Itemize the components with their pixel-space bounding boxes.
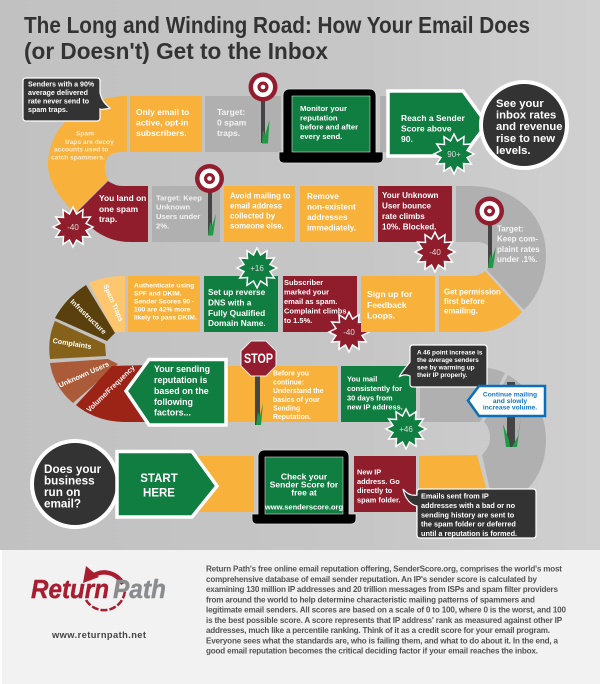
laptop: monitor your reputation: reputation xyxy=(300,114,338,122)
step: reverse DNS: DNS with a xyxy=(208,298,252,308)
circle: see your inbox rates: levels. xyxy=(496,145,531,157)
callout: 90% delivered rate: Senders with a 90% xyxy=(28,80,95,88)
step: subscriber marked as spam: to 1.5%. xyxy=(284,316,312,325)
step: remove non-existent addresses: non-existent xyxy=(307,202,356,212)
road row 1 xyxy=(23,72,567,213)
curve: get permission: emailing. xyxy=(444,306,478,316)
step: feedback loops xyxy=(361,276,435,332)
step: unknown user bounce: User bounce xyxy=(382,202,432,210)
callout: 46 point increase: the average senders xyxy=(417,357,479,364)
step: you land on one spam trap xyxy=(78,181,148,242)
callout: 46 point increase: see by warming up xyxy=(417,364,475,372)
step: only email to subscribers xyxy=(130,96,202,152)
badge: -40 trap: -40 xyxy=(67,223,79,232)
gray connector xyxy=(380,96,388,152)
text block: about sender score: addresses, much like a percentile ranking. Think of it as a credit score for your email program. xyxy=(206,626,550,635)
step: reverse DNS: Fully Qualified xyxy=(208,308,265,318)
icon: volume sign xyxy=(468,382,545,447)
circle: see your inbox rates: rise to new xyxy=(496,133,555,145)
callout: 46 point increase: their IP properly. xyxy=(417,372,467,379)
callout: emails sent from bad IP: addresses with a bad or no xyxy=(421,501,516,510)
text block: about sender score: is the best possible score. A score represents that IP address' rank as measured against other IP xyxy=(206,616,563,625)
arrow: start here: HERE xyxy=(143,488,175,500)
badge: -40 trap xyxy=(53,207,93,247)
text block: about sender score: legitimate email senders. All scores are based on a scale of 0 to 100, where 0 is the worst, and 100 xyxy=(206,606,566,615)
curve: spam traps definition: Spam xyxy=(76,130,94,138)
factor: spam traps xyxy=(89,276,125,332)
circle: does your business run on email: Does your xyxy=(44,463,102,476)
arrow: start here: START xyxy=(140,473,178,485)
step: feedback loops: Feedback xyxy=(367,300,407,310)
step: only email to subscribers: Only email to xyxy=(136,107,189,117)
badge: +46: +46 xyxy=(399,425,413,434)
laptop: monitor your reputation: every send. xyxy=(300,132,342,141)
curve: target complaint rates: under .1%. xyxy=(497,255,537,264)
icon: stop sign: STOP xyxy=(244,351,273,366)
laptop: check your sender score: www.senderscore.org xyxy=(264,502,343,512)
road row 4 xyxy=(126,341,546,495)
step: remove non-existent addresses xyxy=(300,186,374,242)
step: unknown user bounce: rate climbs xyxy=(382,212,425,221)
step: unknown user bounce: 10%. Blocked. xyxy=(382,222,436,232)
step: before you continue: Understand the xyxy=(273,388,324,395)
step: avoid mailing: someone else. xyxy=(230,222,284,230)
step: feedback loops: Loops. xyxy=(367,310,395,320)
step: you mail consistently: consistently for xyxy=(347,384,402,393)
step: authenticate: SPF and DKIM. xyxy=(134,290,182,298)
step: subscriber marked as spam xyxy=(283,276,357,332)
step: before you continue: Reputation. xyxy=(273,414,311,421)
icon: volume sign: Continue mailing xyxy=(483,392,537,398)
callout: emails sent from bad IP xyxy=(403,489,536,538)
logo: Return Path xyxy=(31,566,166,610)
badge: 90+ xyxy=(434,134,474,174)
step: before you continue: continue: xyxy=(273,379,304,386)
step: new IP address: New IP xyxy=(357,468,381,476)
factor: complaints xyxy=(49,321,106,359)
text block: about sender score: from around the world to help determine characteristic mailing patterns of spammers and xyxy=(206,595,535,604)
step: new IP address: spam folder. xyxy=(357,496,401,504)
circle: see your inbox rates: inbox rates xyxy=(496,110,556,122)
curve: get permission: Get permission xyxy=(444,288,501,296)
road row 5 xyxy=(32,441,536,538)
curve: gray right road xyxy=(482,375,546,495)
step: before you continue: basics of your xyxy=(273,397,320,404)
step: subscriber marked as spam: marked your xyxy=(284,288,329,296)
circle: does your business run on email: business xyxy=(44,474,95,488)
curve: target complaint rates: plaint rates xyxy=(497,245,540,254)
curve: target complaint rates: Keep com- xyxy=(497,234,538,244)
callout: 90% delivered rate: average delivered xyxy=(28,89,88,97)
text block: about sender score: comprehensive database of email sender reputation. An IP's sender score is calculated by xyxy=(206,575,537,584)
step: orange connector xyxy=(195,456,254,512)
step: authenticate: likely to pass DKIM. xyxy=(134,314,197,322)
curve: gray upper road xyxy=(420,366,505,422)
step: subscriber marked as spam: Complaint climbs xyxy=(284,306,347,316)
step: you land on one spam trap: one spam xyxy=(99,204,138,214)
step: authenticate: Sender Scores 90 - xyxy=(134,298,194,306)
arrow: start here xyxy=(117,452,217,517)
step: only email to subscribers: subscribers. xyxy=(136,128,187,138)
step: unknown user bounce: Your Unknown xyxy=(382,191,439,200)
callout: emails sent from bad IP: Emails sent from IP xyxy=(421,492,489,500)
arrow: reach a sender score above 90 xyxy=(388,91,487,156)
arrow: your sending reputation: Your sending xyxy=(154,364,210,374)
step: avoid mailing: Avoid mailing to xyxy=(230,192,291,200)
arrow: your sending reputation: based on the xyxy=(154,386,209,396)
arrow: your sending reputation: following xyxy=(154,397,193,407)
step: target 0 spam traps: Target: xyxy=(217,107,245,117)
curve: get permission xyxy=(439,271,522,332)
step: subscriber marked as spam: email as spam. xyxy=(284,297,337,306)
laptop: check your sender score: Sender Score for xyxy=(270,480,339,490)
arrow: reach a sender score above 90: Reach a Sender xyxy=(401,113,465,123)
arrow: reach a sender score above 90: Score above xyxy=(401,124,452,134)
arrow: reach a sender score above 90: 90. xyxy=(401,134,413,144)
step: target unknown users: Users under xyxy=(156,212,200,221)
curve: spam traps definition: catch spammers. xyxy=(51,154,105,162)
step: target 0 spam traps: 0 spam xyxy=(217,118,247,128)
factor: unknown users: Unknown Users xyxy=(57,359,110,390)
step: authenticate: 100 are 42% more xyxy=(134,306,191,314)
arrow: your sending reputation: reputation is xyxy=(154,375,207,385)
curve: target complaint rates: Target: xyxy=(497,224,524,234)
logo: Return Path: Return xyxy=(31,576,109,604)
laptop: check your sender score: free at xyxy=(291,488,317,498)
step: reverse DNS: Set up reverse xyxy=(208,287,266,297)
step: new IP address: directly to xyxy=(357,486,393,495)
circle: see your inbox rates xyxy=(481,82,567,168)
factor: volume/frequency xyxy=(76,363,148,422)
panel: footer xyxy=(0,550,600,684)
text block: about sender score: Return Path's free online email reputation offering, SenderScore.org, comprises the world's most xyxy=(206,564,562,574)
laptop: check your sender score xyxy=(252,450,356,524)
website url: www.returnpath.net xyxy=(51,630,146,640)
circle: see your inbox rates: and revenue xyxy=(496,121,563,133)
badge: +46 xyxy=(386,409,426,449)
badge: -40 bounce xyxy=(415,232,455,272)
badge: -40 complaint: -40 xyxy=(343,328,355,337)
laptop: monitor your reputation: before and after xyxy=(300,123,358,132)
badge: 90+: 90+ xyxy=(447,150,461,159)
circle: does your business run on email xyxy=(32,441,118,527)
callout: 90% delivered rate: spam traps. xyxy=(28,106,68,114)
step: you mail consistently xyxy=(341,366,416,422)
step: target unknown users xyxy=(152,186,220,242)
step: only email to subscribers: active, opt-in xyxy=(136,118,188,128)
factor: volume/frequency: Volume/Frequency xyxy=(85,363,137,414)
badge: -40 complaint xyxy=(329,312,369,352)
curve: spam traps definition xyxy=(48,96,127,213)
step: reverse DNS xyxy=(204,276,278,332)
curve: target complaint rates xyxy=(456,186,546,310)
step: avoid mailing: email address xyxy=(230,202,283,210)
arrow: your sending reputation xyxy=(126,360,226,425)
step: feedback loops: Sign up for xyxy=(367,289,413,299)
step: you mail consistently: You mail xyxy=(347,374,377,384)
step: avoid mailing: collected by xyxy=(230,212,276,220)
step: new IP address: address. Go xyxy=(357,477,400,486)
step: target unknown users: Target: Keep xyxy=(156,194,202,202)
factor: spam traps: Spam Traps xyxy=(101,284,124,323)
step: avoid mailing xyxy=(224,186,295,242)
factor: unknown users xyxy=(50,359,118,403)
curve: spam traps definition: accounts used to xyxy=(54,146,108,154)
step: authenticate: Authenticate using xyxy=(134,282,194,290)
factor: infrastructure: Infrastructure xyxy=(68,297,108,336)
step: you mail consistently: new IP address. xyxy=(347,403,403,412)
step: target 0 spam traps: traps. xyxy=(217,128,240,138)
step: before you continue: Before you xyxy=(273,370,309,378)
curve: orange lower road xyxy=(419,455,488,512)
text block: about sender score: good email reputation becomes the critical deciding factor if your email reaches the inbox. xyxy=(206,646,538,656)
laptop: check your sender score: Check your xyxy=(281,472,328,482)
badge: -40 bounce: -40 xyxy=(429,248,441,257)
curve: get permission: first before xyxy=(444,297,485,306)
icon: volume sign: and slowly xyxy=(493,398,527,405)
icon: volume sign: increase volume. xyxy=(483,404,537,412)
step: target unknown users: 2%. xyxy=(156,222,169,230)
callout: 46 point increase: A 46 point increase is xyxy=(417,350,483,356)
curve: spam traps definition: traps are decoy xyxy=(65,139,114,146)
callout: emails sent from bad IP: until a reputation is formed. xyxy=(421,529,517,538)
step: you land on one spam trap: trap. xyxy=(99,214,117,224)
title: (or Doesn't) Get to the Inbox xyxy=(24,38,328,64)
step: before you continue: Sending xyxy=(273,406,300,412)
step: target unknown users: Unknown xyxy=(156,202,191,212)
step: remove non-existent addresses: Remove xyxy=(307,192,339,201)
step: new IP address xyxy=(354,456,416,512)
step: reverse DNS: Domain Name. xyxy=(208,318,266,328)
icon: target sign 2 xyxy=(195,164,224,236)
step: authenticate xyxy=(128,276,200,332)
step: you land on one spam trap: You land on xyxy=(99,193,146,203)
step: target 0 spam traps xyxy=(205,96,281,152)
icon: target sign 1 xyxy=(248,72,278,144)
laptop: monitor your reputation: Monitor your xyxy=(300,104,347,113)
step: unknown user bounce xyxy=(378,186,452,242)
step: you mail consistently: 30 days from xyxy=(347,394,393,402)
road row 3 xyxy=(49,248,522,422)
road row 2 xyxy=(53,164,546,310)
callout: 46 point increase xyxy=(399,345,487,387)
factor: infrastructure xyxy=(55,285,115,341)
step: subscriber marked as spam: Subscriber xyxy=(284,278,323,287)
circle: does your business run on email: email? xyxy=(44,498,81,510)
callout: emails sent from bad IP: sending history are sent to xyxy=(421,510,515,520)
text block: about sender score: examining 130 million IP addresses and 20 trillion messages from ISPs and spam filter providers xyxy=(206,585,558,594)
step: before you continue xyxy=(228,366,338,422)
text block: about sender score: Everyone sees what the standards are, who is failing them, and what to do about it. In the end, a xyxy=(206,636,558,645)
icon: stop sign xyxy=(241,341,276,425)
circle: see your inbox rates: See your xyxy=(496,98,544,110)
callout: 90% delivered rate: rate never send to xyxy=(28,98,90,106)
factor: complaints: Complaints xyxy=(52,336,92,351)
title: The Long and Winding Road: How Your Email Does xyxy=(24,12,530,38)
badge: +16 xyxy=(237,248,277,288)
step: remove non-existent addresses: immediately. xyxy=(307,224,356,232)
circle: does your business run on email: run on xyxy=(44,486,80,499)
step: remove non-existent addresses: addresses xyxy=(307,213,348,222)
callout: emails sent from bad IP: the spam folder or deferred xyxy=(421,520,516,529)
logo: Return Path: Path xyxy=(113,576,166,604)
arrow: your sending reputation: factors... xyxy=(154,408,191,418)
callout: 90% delivered rate xyxy=(23,78,110,121)
laptop: monitor your reputation xyxy=(279,89,383,163)
badge: +16: +16 xyxy=(250,264,264,273)
icon: target sign 3 xyxy=(475,196,504,268)
